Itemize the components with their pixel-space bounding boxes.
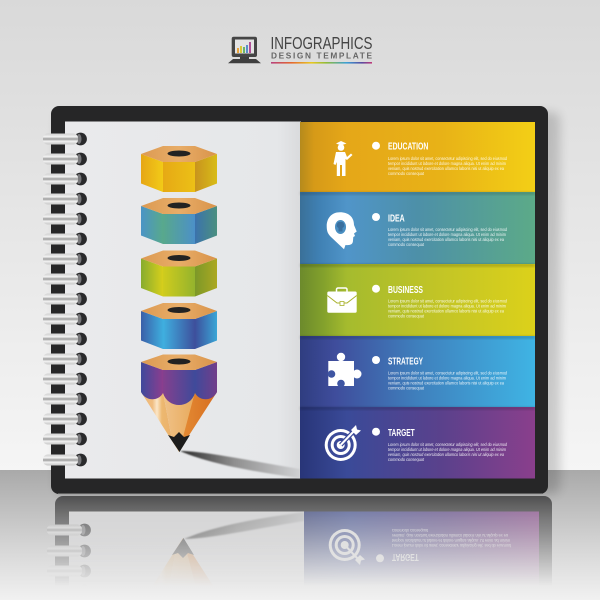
rainbow underline (271, 62, 372, 64)
pencil segment 1 (141, 146, 217, 192)
icon: briefcase (327, 288, 357, 313)
floor reflection of notebook: TARGET (392, 551, 419, 562)
bullet (372, 356, 380, 364)
body text: veniam, quis nostrud exercitation ullamco laboris nisi ut aliquip ex ea (388, 309, 504, 314)
pencil segment 4 (141, 303, 217, 349)
pencil (141, 146, 300, 478)
body text: Lorem ipsum dolor sit amet, consectetur adipiscing elit, sed do eiusmod (388, 442, 507, 447)
notebook left page (65, 122, 301, 478)
body text (388, 299, 507, 319)
icon: computer monitor (228, 37, 261, 63)
strip: target (300, 407, 535, 478)
body text: Lorem ipsum dolor sit amet, consectetur adipiscing elit, sed do eiusmod (388, 370, 507, 375)
icon: head with bulb (327, 212, 357, 249)
body text: veniam, quis nostrud exercitation ullamco laboris nisi ut aliquip ex ea (388, 237, 504, 242)
floor (0, 470, 600, 600)
heading: STRATEGY (388, 356, 423, 367)
body text: tempor incididunt ut labore et dolore magna aliqua. Ut enim ad minim (388, 161, 506, 166)
body text: Lorem ipsum dolor sit amet, consectetur adipiscing elit, sed do eiusmod (388, 156, 507, 161)
pencil lead (168, 432, 190, 452)
bullet (372, 428, 380, 436)
header title: INFOGRAPHICS (270, 33, 372, 53)
pencil shadow (180, 451, 300, 478)
body text: tempor incididunt ut labore et dolore magna aliqua. Ut enim ad minim (388, 232, 506, 237)
strip: idea (300, 192, 535, 264)
pencil segment 2 (141, 198, 217, 244)
body text: commodo consequat (388, 385, 425, 390)
floor reflection of notebook (47, 496, 552, 580)
body text: tempor incididunt ut labore et dolore magna aliqua. Ut enim ad minim (388, 375, 506, 380)
pencil segment 5 with scallops (141, 354, 217, 405)
icon: puzzle piece (328, 353, 362, 387)
strip: business (300, 264, 535, 336)
pencil segment 3 (141, 250, 217, 296)
body text: veniam, quis nostrud exercitation ullamco laboris nisi ut aliquip ex ea (388, 452, 504, 457)
heading: TARGET (388, 428, 415, 439)
body text: commodo consequat (388, 314, 425, 319)
notebook cover (51, 106, 548, 494)
bullet (372, 213, 380, 221)
floor reflection of notebook: tempor incididunt ut labore et dolore magna aliqua. Ut enim ad minim (392, 538, 510, 543)
body text: tempor incididunt ut labore et dolore magna aliqua. Ut enim ad minim (388, 304, 506, 309)
header subtitle: DESIGN TEMPLATE (271, 50, 372, 60)
body text: commodo consequat (388, 242, 425, 247)
body text: tempor incididunt ut labore et dolore magna aliqua. Ut enim ad minim (388, 447, 506, 452)
heading: EDUCATION (388, 142, 428, 153)
header logo (228, 33, 372, 64)
body text: Lorem ipsum dolor sit amet, consectetur adipiscing elit, sed do eiusmod (388, 299, 507, 304)
body text: veniam, quis nostrud exercitation ullamco laboris nisi ut aliquip ex ea (388, 166, 504, 171)
notebook shadow (56, 112, 560, 494)
floor reflection of notebook: Lorem ipsum dolor sit amet, consectetur adipiscing elit, sed do eiusmod (392, 543, 511, 548)
body text: commodo consequat (388, 171, 425, 176)
body text (388, 227, 507, 247)
icon: target with arrow (325, 425, 361, 461)
floor reflection of notebook: veniam, quis nostrud exercitation ullamco laboris nisi ut aliquip ex ea (392, 533, 508, 538)
heading: BUSINESS (388, 285, 423, 296)
background wall (0, 0, 600, 471)
floor reflection of notebook: commodo consequat (392, 528, 429, 533)
spiral binding rings (43, 133, 87, 466)
bullet (372, 142, 380, 150)
body text: commodo consequat (388, 457, 425, 462)
heading: IDEA (388, 213, 405, 224)
body text (388, 442, 507, 462)
icon: graduate (334, 141, 352, 176)
body text (388, 156, 507, 176)
body text: veniam, quis nostrud exercitation ullamco laboris nisi ut aliquip ex ea (388, 380, 504, 385)
strip: strategy (300, 336, 535, 407)
bullet (372, 285, 380, 293)
notebook floor edge (58, 493, 542, 494)
body text: Lorem ipsum dolor sit amet, consectetur adipiscing elit, sed do eiusmod (388, 227, 507, 232)
pencil tip wood (141, 392, 217, 452)
body text (388, 370, 507, 390)
strip: education (300, 122, 535, 192)
